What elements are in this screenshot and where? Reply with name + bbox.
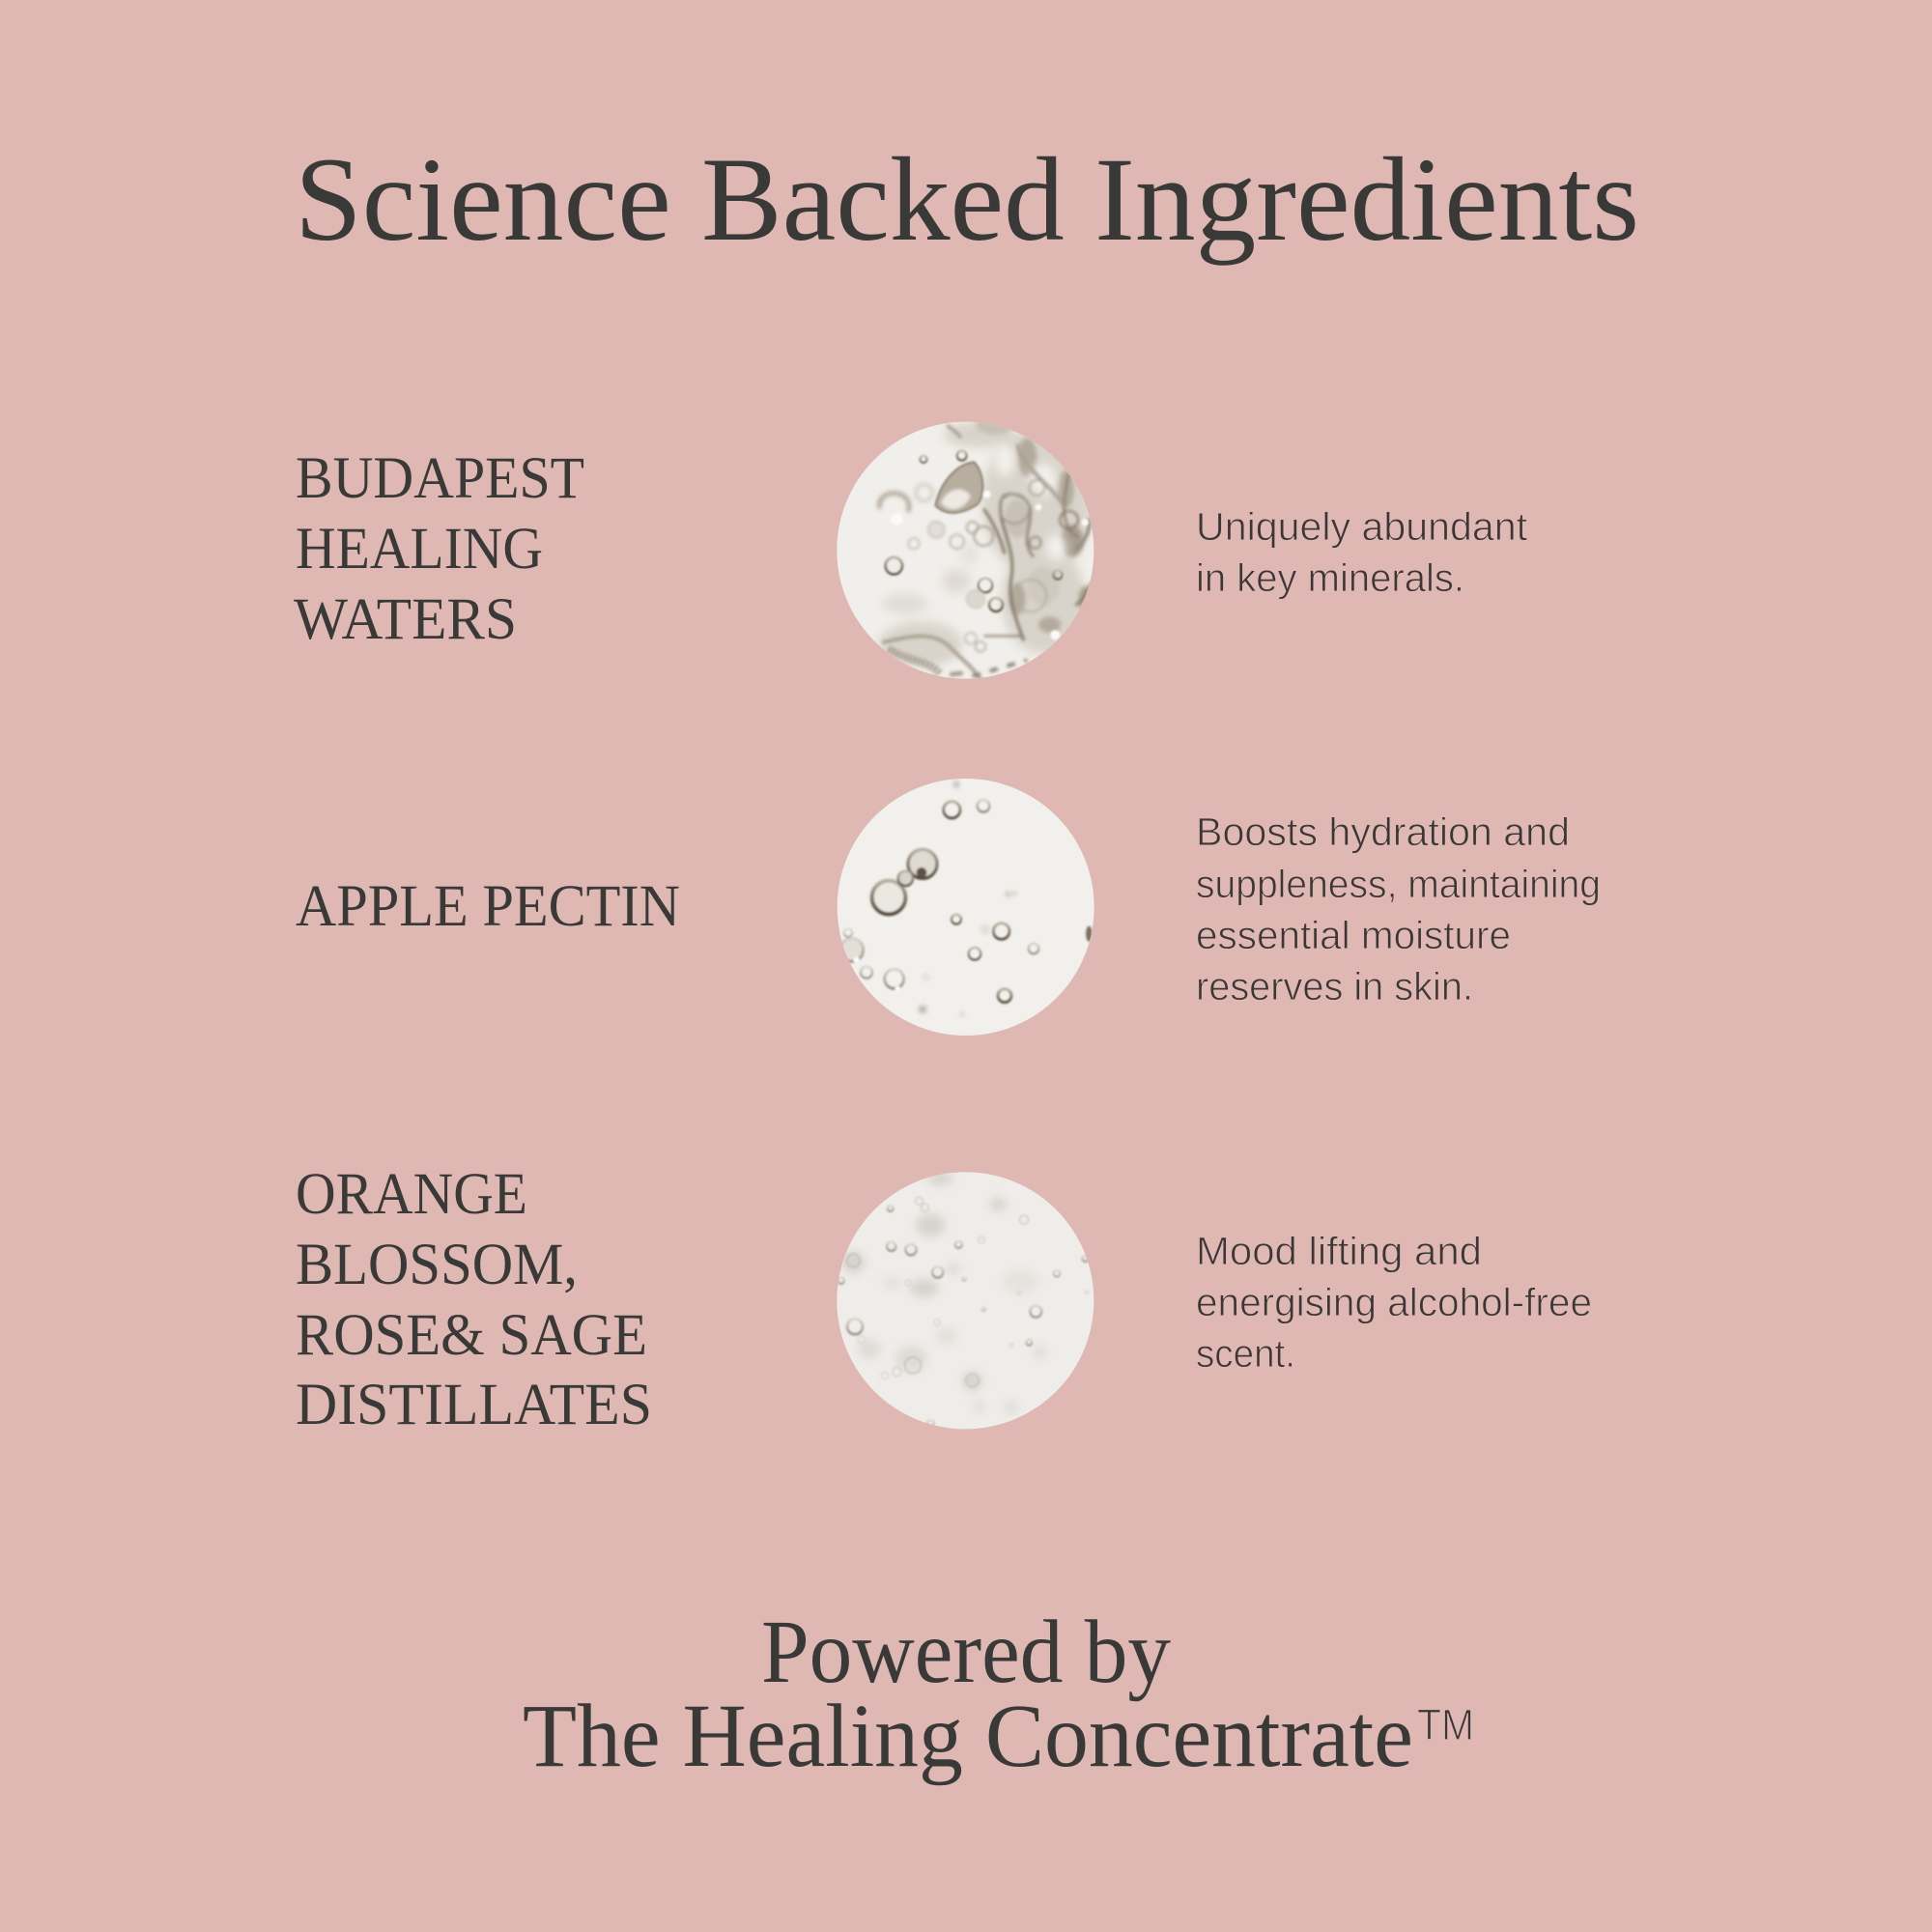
ingredient name: Budapest Healing Waters: WATERS xyxy=(294,587,517,652)
closing heading xyxy=(523,1603,1474,1786)
ingredient name: Orange Blossom, Rose & Sage Distillates: ROSE& SAGE xyxy=(296,1303,647,1368)
closing heading: TM xyxy=(1417,1700,1474,1749)
description: energising alcohol-free xyxy=(1196,1280,1592,1324)
description: Uniquely abundant xyxy=(1196,504,1528,549)
ingredient name: Orange Blossom, Rose & Sage Distillates xyxy=(296,1162,652,1437)
ingredient name: Budapest Healing Waters: BUDAPEST xyxy=(296,446,584,511)
description xyxy=(1196,810,1601,1009)
description: essential moisture xyxy=(1196,913,1511,957)
photo circle: bubbles xyxy=(837,779,1094,1036)
closing heading: The Healing Concentrate xyxy=(523,1687,1413,1786)
ingredient name: Budapest Healing Waters xyxy=(294,446,584,652)
ingredient name: Orange Blossom, Rose & Sage Distillates: ORANGE xyxy=(296,1162,527,1227)
ingredient name: Orange Blossom, Rose & Sage Distillates: DISTILLATES xyxy=(296,1373,652,1437)
row: Orange Blossom, Rose and Sage Distillates xyxy=(298,1172,1590,1430)
ingredient name: Orange Blossom, Rose & Sage Distillates: BLOSSOM, xyxy=(296,1233,578,1297)
closing heading: Powered by xyxy=(761,1603,1171,1702)
description: suppleness, maintaining xyxy=(1196,862,1601,906)
ingredient name: Budapest Healing Waters: HEALING xyxy=(296,517,543,582)
mottled splash tones xyxy=(976,415,1092,633)
description xyxy=(1196,504,1528,600)
description: scent. xyxy=(1196,1331,1295,1376)
row: Apple Pectin xyxy=(296,779,1598,1036)
description: in key minerals. xyxy=(1196,555,1464,600)
photo circle: fine bubbles xyxy=(837,1172,1094,1430)
photo circle: water splash xyxy=(837,421,1094,679)
row: Budapest Healing Waters xyxy=(294,421,1526,679)
ingredient name: Apple Pectin: APPLE PECTIN xyxy=(296,874,680,939)
description: reserves in skin. xyxy=(1196,964,1473,1009)
description: Mood lifting and xyxy=(1196,1229,1482,1273)
description xyxy=(1196,1229,1592,1376)
description: Boosts hydration and xyxy=(1196,810,1570,854)
title: Science Backed Ingredients xyxy=(295,133,1639,266)
